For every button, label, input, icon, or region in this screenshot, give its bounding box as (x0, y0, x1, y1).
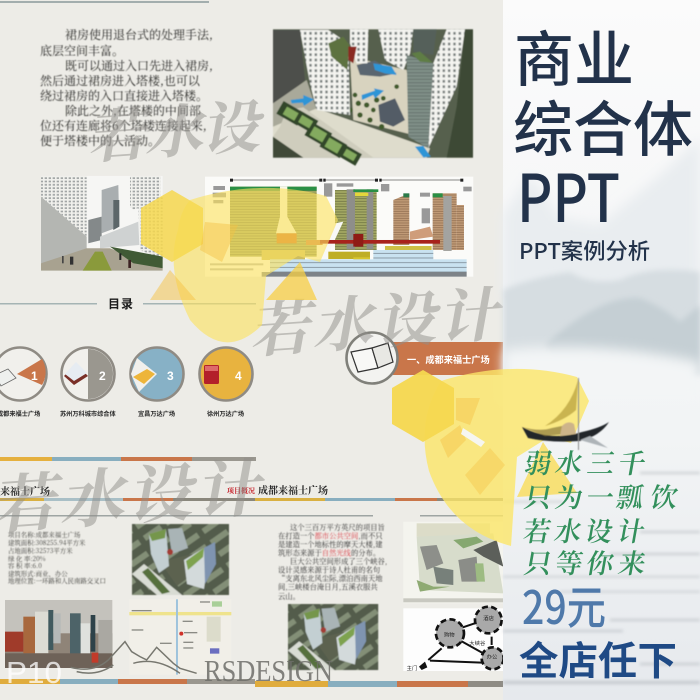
slide 1: building analysis (0, 1, 473, 277)
watermark: brand text: 若水设 (85, 79, 272, 175)
text block: concept: 巨大公共空间形成了三个峡谷, (290, 557, 387, 567)
title: PPT (517, 146, 620, 242)
slide 3: project overview (0, 483, 256, 684)
heading: 成都来福士广场 (258, 482, 328, 497)
mountains (503, 138, 700, 400)
text block: project data (8, 530, 106, 585)
item 1: circle (0, 348, 46, 400)
watermark: brand text (0, 79, 514, 547)
item labels (0, 409, 244, 418)
item 2: circle: 2 (99, 369, 106, 383)
subtitle: PPT案例分析 (519, 234, 650, 266)
site plan (403, 522, 503, 603)
chart: building section diagram (205, 177, 473, 277)
yellow logo: lower (392, 369, 589, 546)
text block: podium description: 绕过裙房的入口直接进入塔楼。 (40, 87, 208, 104)
text block: project data: 地理位置:一环路和人民南路交叉口 (8, 576, 106, 585)
text block: project data: 绿 化 率:20% (8, 554, 46, 563)
icon: mountain outline (71, 642, 197, 673)
bottom color bar right (255, 681, 503, 687)
map (129, 599, 231, 675)
text block: podium description: 位还有连廊将6个塔楼连接起来, (40, 117, 207, 134)
heading: contents: 目录 (108, 295, 134, 312)
poem text: 弱水三千 (522, 442, 649, 481)
slide 2: table of contents (0, 295, 256, 461)
water streaks (503, 472, 700, 684)
header bar (255, 498, 503, 516)
item 3: circle (130, 348, 184, 400)
diagram: three canyons: 大峡谷 (469, 639, 486, 647)
poem text (521, 442, 681, 581)
diagram: three canyons: 办公 (487, 652, 498, 660)
right panel: cover (503, 0, 700, 700)
text block: concept: 这个三百万平方英尺的项目旨 (290, 523, 385, 533)
slide 4: project overview right (227, 332, 504, 687)
item labels: 徐州万达广场 (207, 409, 244, 418)
label: overview tag: 项目概况 (227, 486, 255, 496)
poem text: 只为一瓢饮 (522, 476, 681, 515)
text block: concept: 间,三峡楼台淹日月,五溪衣服共 (278, 582, 378, 592)
photo: aerial of towers and plaza (273, 29, 473, 166)
text block: concept: 筑形态来源于自然光线的分布。 (278, 548, 380, 558)
text block: podium description (40, 26, 213, 149)
text block: concept: “支离东北风尘际,漂泊西南天地 (278, 574, 383, 584)
text block: project data: 项目名称:成都来福士广场 (8, 530, 81, 539)
photo: city skyline (5, 600, 112, 668)
item 2: circle (62, 348, 114, 400)
call to action: 全店任下 (519, 630, 677, 687)
item 4: circle: 4 (235, 369, 242, 383)
item labels: 宜昌万达广场 (138, 409, 175, 418)
item labels: 苏州万科城市综合体 (60, 409, 116, 418)
logotype: RSDESIGN (204, 653, 333, 688)
tab: section banner (346, 332, 503, 384)
item 4: circle (200, 348, 252, 400)
text block: project data: 占地面积:32573平方米 (8, 546, 73, 555)
diagram: three canyons (403, 607, 504, 672)
poem text: 只等你来 (522, 542, 649, 581)
price: 29元 (522, 572, 606, 638)
text block: podium description: 除此之外,在塔楼的中间部 (65, 102, 201, 119)
text block: concept: 设计灵感来源于诗人杜甫的名句 (278, 566, 380, 576)
photo: street view between towers (41, 176, 163, 271)
text block: podium description: 便于塔楼中的人活动。 (40, 132, 160, 149)
text block: project data: 容 积 率:6.0 (8, 561, 42, 570)
watermark: brand text: 若水设计 (247, 267, 514, 370)
text block: podium description: 然后通过裙房进入塔楼,也可以 (40, 72, 201, 89)
text block: concept: 在打造一个都市公共空间,而不只 (278, 532, 383, 542)
title: 综合体 (513, 82, 693, 169)
divider bar (0, 457, 256, 461)
title (513, 12, 693, 242)
page number: P10 (6, 655, 62, 690)
text block: concept: 云山。 (278, 592, 300, 602)
text block: podium description: 既可以通过入口先进入裙房, (65, 57, 213, 74)
diagram: three canyons: 主门 (407, 664, 417, 672)
poem text: 若水设计 (521, 510, 648, 549)
diagram: three canyons: 购物 (444, 631, 455, 639)
text block: project data: 建筑面积:308255.94平方米 (8, 538, 86, 547)
tab: section banner: 一、成都来福士广场 (407, 352, 490, 366)
text block: project data: 建筑形式:商业、办公 (8, 569, 68, 578)
text block: podium description: 底层空间丰富。 (40, 42, 124, 59)
text block: concept (278, 523, 387, 602)
heading: 来福士广场 (0, 483, 50, 498)
item 1: circle: 1 (31, 369, 38, 383)
text block: concept: 是建造一个地标性的摩天大楼,建 (278, 540, 383, 550)
title: 商业 (514, 12, 634, 99)
text block: podium description: 裙房使用退台式的处理手法, (65, 26, 213, 43)
diagram: three canyons: 酒店 (483, 614, 495, 622)
brand logo (71, 642, 333, 688)
yellow logo: upper (141, 188, 338, 342)
icon: ink boat (522, 378, 609, 450)
header bar (0, 498, 256, 516)
bottom color bar left (0, 679, 255, 684)
photo: aerial render small (288, 604, 378, 670)
photo: aerial render (132, 524, 229, 595)
background: ppt slides (0, 0, 505, 700)
item 3: circle: 3 (167, 369, 174, 383)
